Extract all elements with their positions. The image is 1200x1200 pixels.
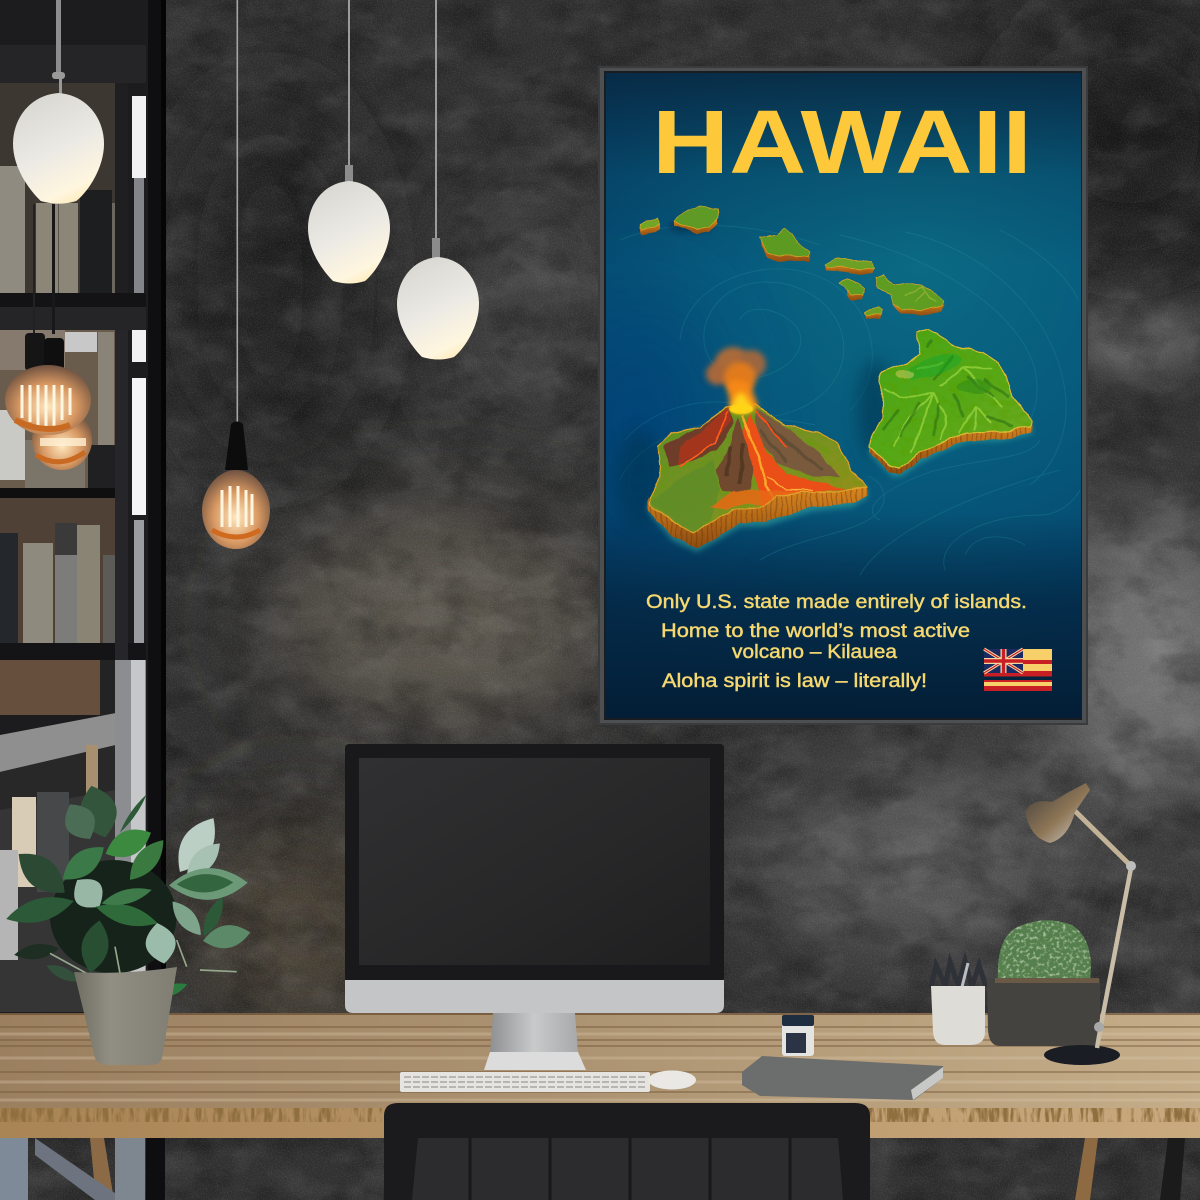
pendant lamp: white globe centre <box>308 0 390 284</box>
eruption plume and crater <box>706 347 766 414</box>
islands: Maui <box>875 275 946 315</box>
mouse <box>648 1070 696 1090</box>
icon: Hawaiian flag <box>984 649 1052 691</box>
books: top shelf <box>0 166 126 293</box>
monitor stand <box>490 1013 578 1053</box>
pendant lamp: white globe right <box>397 0 479 360</box>
desk lamp <box>1025 783 1136 1065</box>
islands: Kahoolawe <box>865 307 882 320</box>
plant leaves <box>3 781 252 1001</box>
islands: Niihau <box>640 218 660 235</box>
plant pot <box>74 967 177 1065</box>
desk legs <box>0 1138 1185 1200</box>
office chair <box>384 1103 870 1200</box>
water swirl lines <box>620 225 1080 575</box>
desk planter <box>987 918 1100 1046</box>
potted plant <box>3 781 252 1065</box>
poster sea background <box>570 73 1081 718</box>
fact: active volcano: Home to the world’s most active <box>661 621 970 642</box>
fact: only state made of islands: Only U.S. state made entirely of islands. <box>646 592 1027 613</box>
islands: Lanai <box>840 279 864 300</box>
edison bulbs on shelf <box>5 333 92 470</box>
bookshelf <box>0 0 166 1013</box>
poster frame <box>598 66 1088 725</box>
fact: active volcano: volcano – Kilauea <box>732 642 897 663</box>
hanging edison bulb <box>202 0 270 549</box>
pendant lamp: white globe left <box>13 0 104 334</box>
framed poster <box>570 66 1088 725</box>
keyboard <box>400 1072 650 1092</box>
island: volcano <box>616 347 875 552</box>
small cup <box>782 1015 814 1056</box>
pen cup <box>931 961 986 1045</box>
islands: Kauai <box>670 207 718 234</box>
desktop monitor <box>345 744 724 1070</box>
terrain ridges <box>883 340 1013 453</box>
title: HAWAII <box>652 93 1032 193</box>
fact: aloha spirit: Aloha spirit is law – literally! <box>662 671 927 692</box>
island: Big Island green <box>857 320 1040 477</box>
books: middle shelf <box>0 523 123 643</box>
volcano slopes and lava flows <box>650 407 847 533</box>
notebook <box>742 1056 943 1100</box>
desk <box>0 1013 1200 1200</box>
islands: Oahu <box>760 229 811 262</box>
fact: active volcano <box>661 621 970 663</box>
islands: Molokai <box>825 258 875 275</box>
